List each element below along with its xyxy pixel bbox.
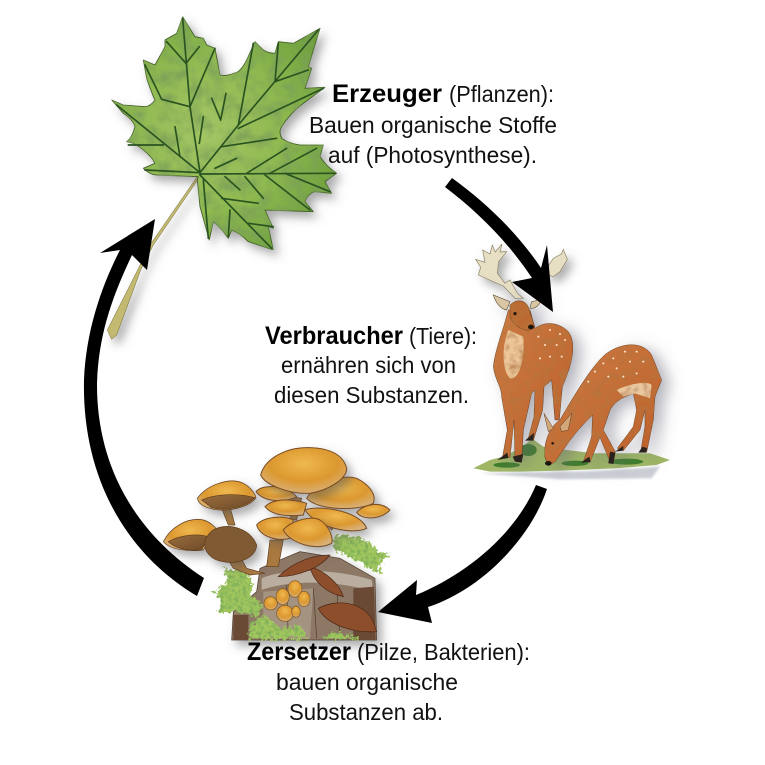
dry leaves: [278, 555, 377, 632]
front caps: [261, 448, 347, 547]
text: Erzeuger: (Pflanzen):: [449, 81, 554, 107]
text: Erzeuger: Bauen organische Stoffe: [309, 112, 557, 138]
leaf stalk: [107, 175, 200, 339]
moss: [215, 533, 392, 639]
icon: fallow deer (Verbraucher): [473, 244, 670, 479]
text: Erzeuger: auf (Photosynthese).: [328, 142, 537, 168]
arrow: Verbraucher to Zersetzer: [378, 485, 547, 623]
arrow: Erzeuger to Verbraucher: [445, 178, 553, 312]
left mushrooms with gills: [163, 481, 257, 562]
stag: [493, 295, 573, 463]
text: Verbraucher: diesen Substanzen.: [274, 382, 469, 408]
icon: maple leaf (Erzeuger): [107, 17, 337, 339]
stag antlers: [476, 244, 567, 298]
text: Erzeuger: Erzeuger: [332, 80, 442, 108]
text: Zersetzer: bauen organische: [276, 669, 458, 695]
text: Zersetzer: (Pilze, Bakterien):: [357, 639, 530, 665]
rear caps: [256, 477, 390, 539]
leaf blade: [112, 17, 337, 250]
arrow: Zersetzer to Erzeuger: [84, 219, 204, 596]
text: Verbraucher: Verbraucher: [265, 322, 403, 350]
text: Zersetzer: Zersetzer: [247, 638, 351, 666]
stump: [232, 552, 377, 640]
grass: [473, 438, 670, 479]
doe: [544, 345, 662, 466]
text: Verbraucher: (Tiere):: [409, 323, 477, 349]
text: Verbraucher: ernähren sich von: [281, 352, 456, 378]
text: Zersetzer: Substanzen ab.: [289, 699, 443, 725]
stems: [222, 497, 338, 575]
icon: mushrooms on tree stump (Zersetzer): [163, 448, 392, 640]
small mushrooms: [264, 581, 310, 621]
